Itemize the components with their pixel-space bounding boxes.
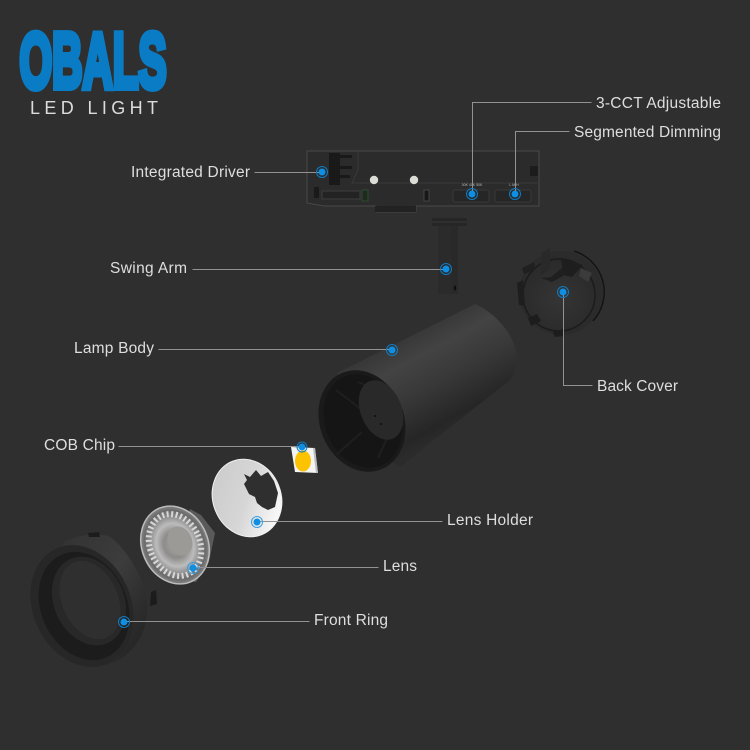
back cover [517,248,604,337]
front opening [304,357,420,485]
central opening [244,470,278,510]
callout: Lens Holder: Lens Holder [447,512,533,529]
callout: Segmented Dimming [510,124,721,200]
front ring [12,529,157,683]
lens holder [201,449,293,547]
callout: Integrated Driver: Integrated Driver [131,164,250,181]
callout: COB Chip [44,437,307,454]
callout: COB Chip: COB Chip [44,437,115,454]
logo [20,16,166,118]
track adapter driver box: L M H [509,183,519,187]
ring tabs [88,532,100,537]
track adapter driver box [307,151,539,212]
inner reflector ribs [336,382,388,458]
callout: Back Cover: Back Cover [597,378,678,395]
front rim [12,529,152,683]
callout: Lens Holder [252,512,533,529]
lens facet pattern [139,506,211,584]
callout: Front Ring [118,612,388,629]
ring aperture [48,551,132,649]
screws [370,176,378,184]
callout: 3-CCT Adjustable [466,95,721,200]
callout: Back Cover [558,286,678,395]
callout: Front Ring: Front Ring [314,612,388,629]
inner disc [350,374,412,446]
switch legends: 30K 40K 50K [462,183,483,187]
callout: Integrated Driver [131,164,328,181]
lens [129,495,221,595]
callout: Swing Arm: Swing Arm [110,260,187,277]
callout: Lens: Lens [383,558,417,575]
logo subtitle: LED LIGHT [30,98,158,118]
logo wordmark: OBALS [20,16,166,104]
callout: Lamp Body: Lamp Body [74,340,154,357]
callout: Segmented Dimming: Segmented Dimming [574,124,721,141]
callout: Swing Arm [110,260,452,277]
callout: Lens [188,558,417,575]
callout: Lamp Body [74,340,398,357]
lamp body [304,304,517,485]
COB chip [291,447,318,473]
callout: 3-CCT Adjustable: 3-CCT Adjustable [596,95,721,112]
swing arm [432,218,467,294]
